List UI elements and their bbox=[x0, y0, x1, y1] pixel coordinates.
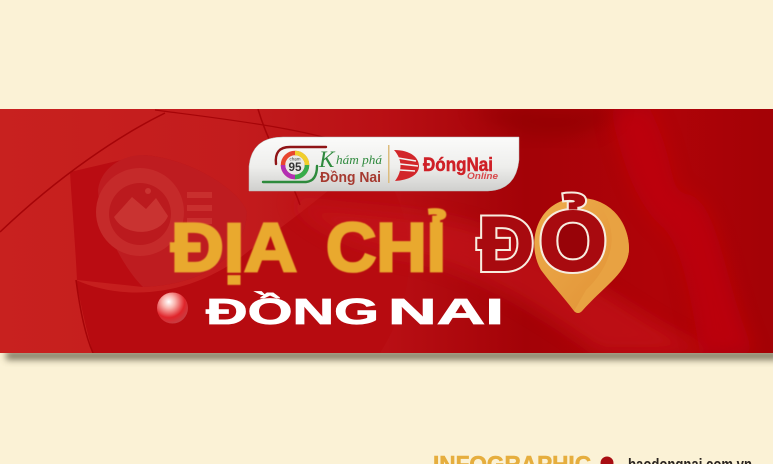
heading: ĐỎ outlined bbox=[478, 194, 607, 288]
heading: ĐỎ outlined: Ỏ bbox=[539, 194, 607, 288]
heading: ĐỒNG NAI: NAI bbox=[388, 291, 504, 332]
camera aperture watermark bbox=[0, 109, 338, 353]
logo: Đồng Nai Online bbox=[394, 150, 498, 181]
logo: Khám phá Đồng Nai: 95 bbox=[288, 162, 302, 174]
icon: red ball bullet bbox=[157, 292, 188, 324]
heading: ĐỎ outlined: Ỏ bbox=[539, 194, 607, 288]
infographic banner canvas bbox=[0, 109, 773, 464]
heading: ĐỎ outlined: Đ bbox=[478, 202, 534, 287]
heading: ĐỒNG NAI: ĐỒNG bbox=[206, 290, 379, 332]
logo: Khám phá Đồng Nai: K bbox=[318, 147, 336, 172]
icon: location pin bbox=[534, 198, 629, 313]
logo: Khám phá Đồng Nai: hám phá bbox=[336, 152, 383, 167]
heading: ĐỊA CHỈ: ĐỊA bbox=[171, 209, 297, 286]
logo plate bbox=[249, 137, 519, 191]
heading: ĐỊA CHỈ bbox=[171, 209, 446, 286]
logo: Khám phá Đồng Nai: chạm bbox=[289, 156, 301, 162]
logo: Khám phá Đồng Nai bbox=[263, 147, 383, 186]
logo: Đồng Nai Online: ĐóngNai bbox=[423, 155, 493, 176]
logo divider bbox=[388, 145, 390, 183]
silk fold highlights bbox=[290, 109, 755, 353]
heading: ĐỊA CHỈ: CHỈ bbox=[326, 209, 446, 286]
heading: ĐỎ outlined: Đ bbox=[478, 202, 534, 287]
icon: red dot bbox=[600, 456, 614, 464]
heading: ĐỒNG NAI bbox=[206, 290, 504, 332]
logo: Đồng Nai Online: Online bbox=[467, 171, 498, 181]
banner shadow bbox=[6, 351, 773, 360]
logo: Khám phá Đồng Nai: Đồng Nai bbox=[320, 170, 381, 186]
red banner bbox=[0, 109, 773, 353]
